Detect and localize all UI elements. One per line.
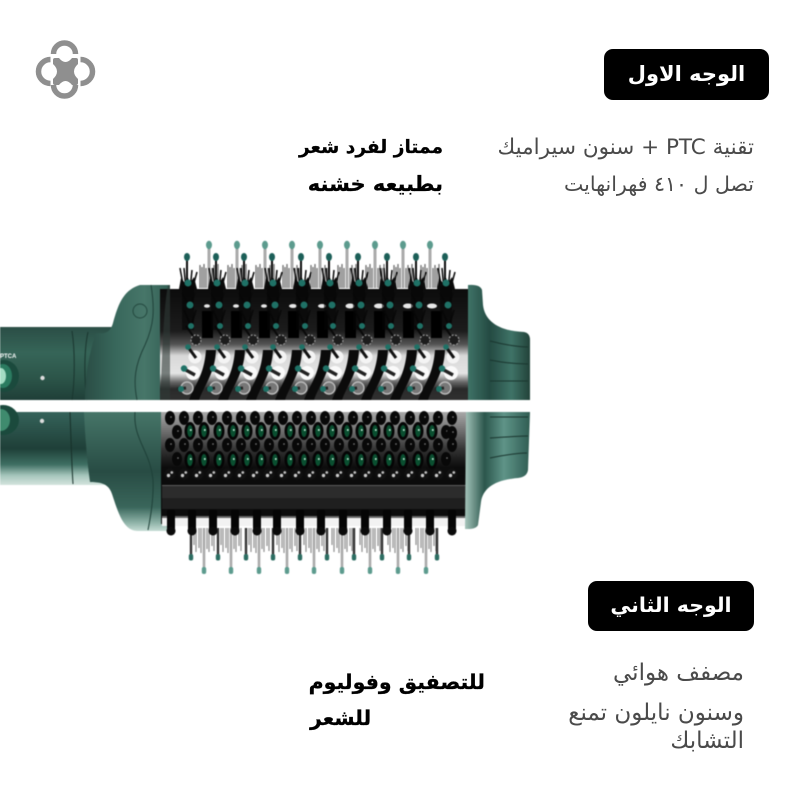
badge: first side (604, 49, 769, 100)
badge: first side: الوجه الاول (628, 62, 745, 86)
black pin bases bottom (166, 510, 456, 536)
end cap bottom (465, 412, 530, 529)
pin columns top (177, 253, 460, 394)
slots (189, 304, 445, 400)
text: first side features: تصل ل ٤١٠ فهرانهايت (564, 172, 754, 196)
green pin row 2 (172, 451, 451, 469)
tall pins top (200, 241, 439, 288)
text: first side features: تقنية PTC + سنون سيراميك (498, 135, 754, 160)
text: second side benefit: للتصفيق وفوليوم (309, 670, 485, 694)
green pin row 1 (172, 422, 457, 440)
top half (0, 241, 530, 400)
icon: logo (36, 40, 96, 99)
bands (162, 485, 468, 526)
text: first side benefit: بطبيعه خشنه (308, 172, 443, 196)
pin tips row (164, 468, 458, 480)
text: second side benefit: للشعر (310, 706, 371, 730)
text: second side benefit (309, 670, 485, 730)
badge: second side: الوجه الثاني (610, 593, 732, 617)
black pin row 2 (165, 438, 457, 452)
handle bottom (0, 412, 115, 485)
badge: second side (588, 581, 754, 631)
text: second side features: وسنون نايلون تمنع (568, 700, 744, 726)
text: second side features: مصفف هوائي (613, 660, 744, 686)
text: first side benefit: ممتاز لفرد شعر (299, 137, 443, 158)
end cap top (468, 285, 530, 400)
product image: hair dryer brush (0, 240, 531, 575)
power button bottom (0, 405, 19, 435)
bottom half (0, 405, 530, 574)
power button top (0, 354, 19, 392)
text: first side features (498, 135, 754, 196)
collar top (85, 285, 170, 400)
black pin row 1 (165, 411, 457, 425)
power button top: PTCA (0, 354, 17, 360)
text: first side benefit (298, 137, 443, 196)
long silver bristles bottom (189, 528, 439, 574)
barrel bottom (161, 412, 468, 524)
text: second side features (568, 660, 744, 754)
handle top (0, 327, 112, 400)
text: second side features: التشابك (670, 728, 744, 754)
barrel top (160, 289, 470, 400)
collar bottom (84, 412, 170, 531)
